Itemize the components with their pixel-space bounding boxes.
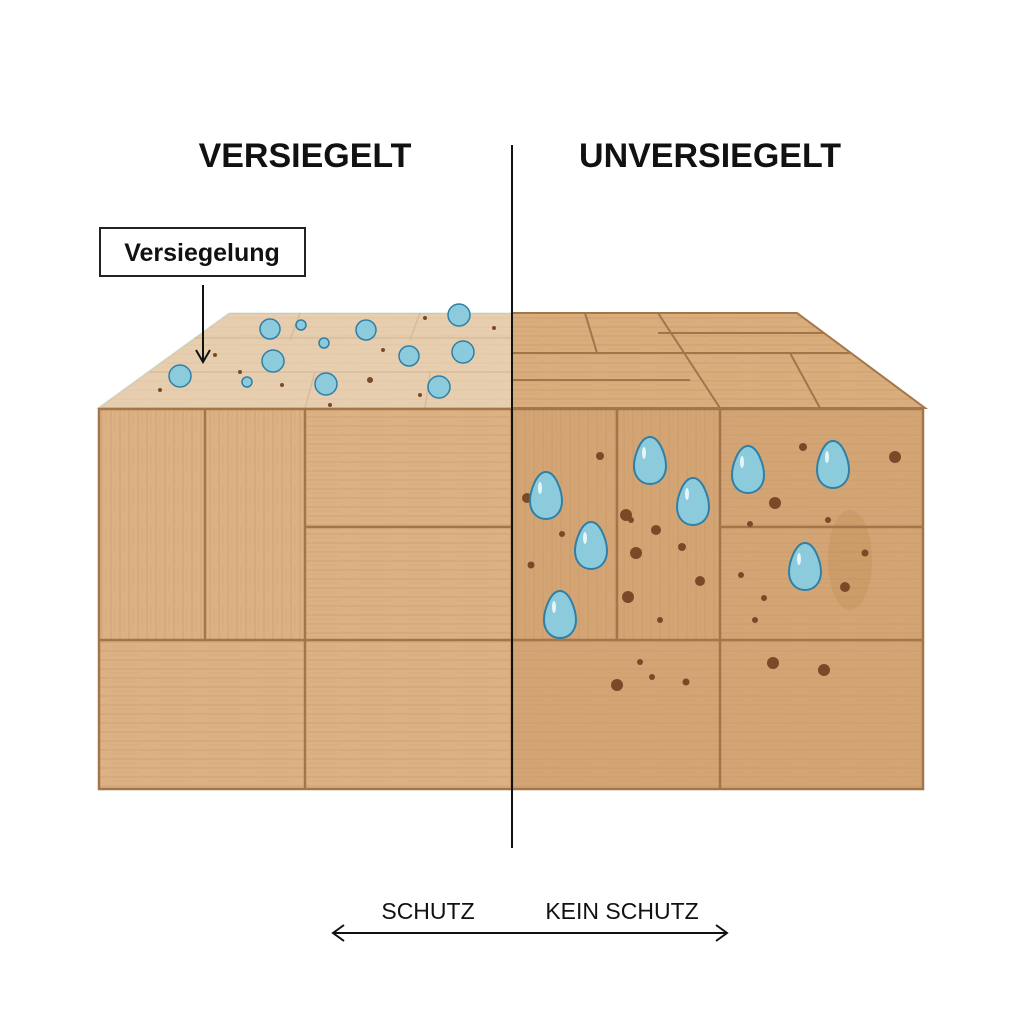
title: versiegelt: VERSIEGELT: [199, 137, 412, 175]
arrow: label to sealing: [196, 285, 210, 362]
title: unversiegelt: UNVERSIEGELT: [579, 137, 841, 175]
arrow: double-headed: [333, 925, 727, 941]
label: Versiegelung: Versiegelung: [124, 239, 280, 267]
top face: sealed: [98, 304, 512, 408]
front face: sealed: [98, 408, 512, 790]
label: Versiegelung: [100, 228, 305, 276]
text: KEIN SCHUTZ: [545, 898, 699, 924]
water drops: [530, 437, 849, 638]
top face: unsealed: [512, 313, 925, 408]
water beads: [169, 304, 474, 398]
bottom labels: SCHUTZ: [381, 898, 475, 924]
front face: unsealed: [512, 408, 924, 790]
dirt spots: [522, 443, 901, 691]
divider line: [511, 145, 513, 848]
